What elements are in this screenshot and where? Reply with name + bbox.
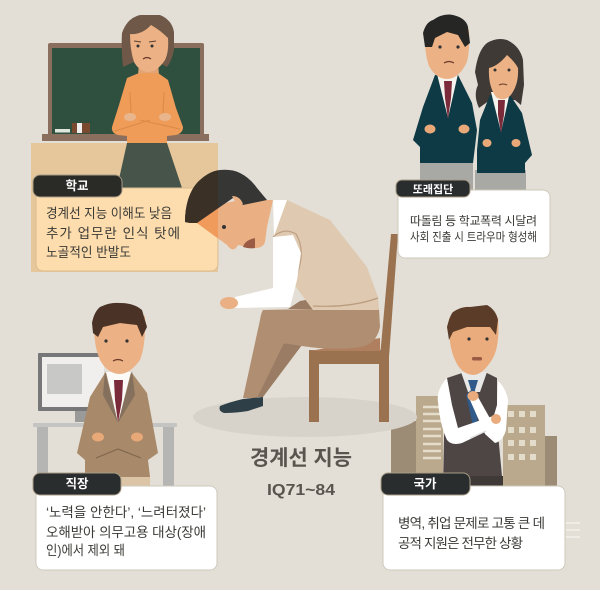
illustration: office worker and computer <box>33 303 177 488</box>
callout: peer group <box>396 180 550 258</box>
callout: school: 추가 업무란 인식 탓에 <box>46 226 180 241</box>
subtitle: IQ71~84 <box>267 482 335 499</box>
callout: peer group: 또래집단 <box>413 182 453 196</box>
callout: workplace <box>33 473 217 570</box>
watermark fragment <box>566 523 580 537</box>
callout: nation: 병역, 취업 문제로 고통 큰 데 <box>398 516 545 531</box>
callout: workplace: 인)에서 제외 돼 <box>46 543 125 558</box>
illustration: man with city buildings <box>391 305 557 487</box>
ground shadow <box>193 397 417 437</box>
illustration: sad man sitting <box>185 170 380 413</box>
callout: peer group: 따돌림 등 학교폭력 시달려 <box>410 214 537 228</box>
callout: school: 노골적인 반발도 <box>46 245 131 260</box>
illustration: head of sitting man <box>185 170 273 249</box>
callout: nation <box>381 473 565 570</box>
illustration: teacher at blackboard <box>31 15 218 272</box>
callout: peer group: 사회 진출 시 트라우마 형성해 <box>410 230 537 244</box>
callout: school: 경계선 지능 이해도 낮음 <box>46 206 172 221</box>
title: 경계선 지능 <box>250 447 352 470</box>
tinted overlap of head on school callout <box>185 170 218 238</box>
callout: school: 학교 <box>65 178 89 193</box>
callout: workplace: 직장 <box>65 477 89 491</box>
callout: nation: 국가 <box>413 476 437 491</box>
callout: workplace: ‘노력을 안한다’, ‘느려터졌다’ <box>46 505 206 520</box>
illustration: chair <box>309 234 398 422</box>
callout: workplace: 오해받아 의무고용 대상(장애 <box>46 525 206 540</box>
callout: school <box>33 175 218 271</box>
illustration: two students in blazers <box>413 15 532 190</box>
callout: nation: 공적 지원은 전무한 상황 <box>398 536 523 551</box>
